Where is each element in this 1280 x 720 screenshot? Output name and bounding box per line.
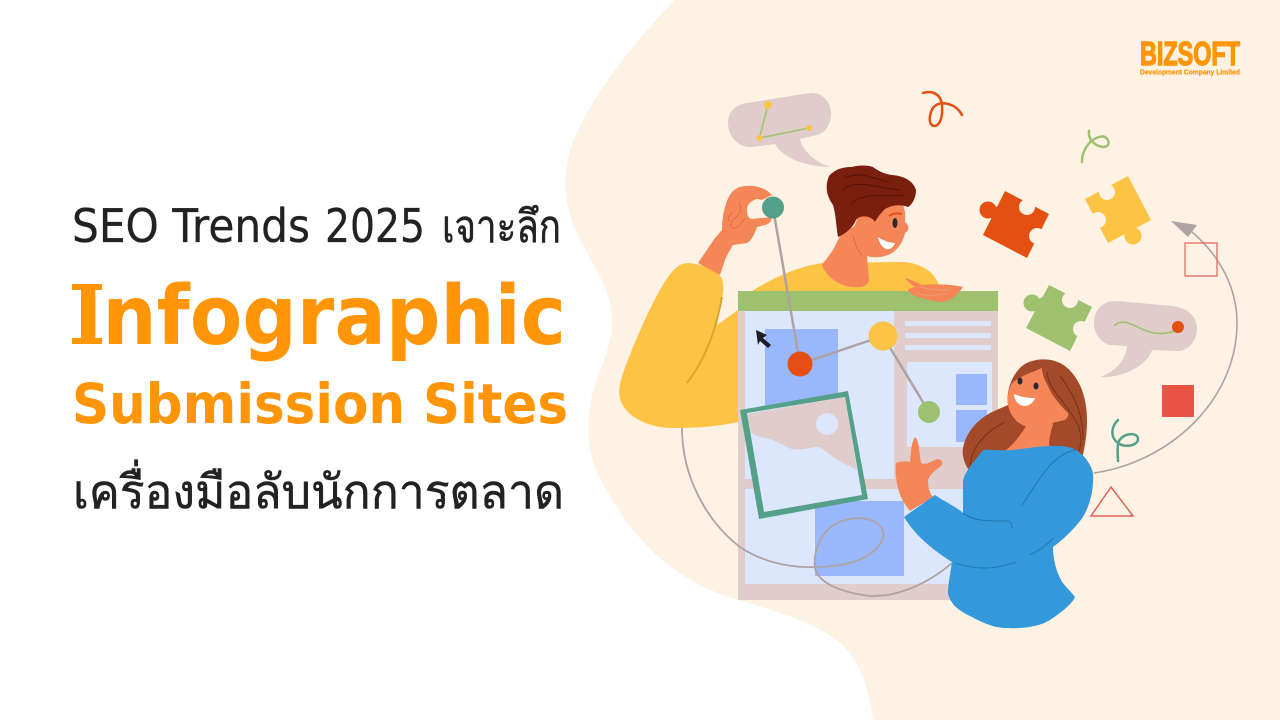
side block two [956, 410, 987, 442]
heading line 1 [72, 199, 561, 253]
pointing hand [896, 437, 942, 511]
heading line 2: Infographic [74, 269, 566, 364]
window frame [738, 291, 998, 600]
blue top [904, 446, 1093, 628]
mouse cursor icon [756, 330, 771, 348]
eyes [1018, 378, 1022, 384]
eyebrow [889, 213, 902, 216]
blue block top [765, 329, 838, 419]
eye [892, 218, 898, 228]
puzzle green [1024, 285, 1092, 351]
hair strands [971, 372, 1083, 470]
hair strands [842, 175, 905, 205]
neck [1005, 424, 1053, 451]
curved thread [682, 428, 952, 596]
bubble line [1114, 322, 1175, 334]
main pane [745, 311, 894, 479]
finger lines [728, 203, 745, 228]
side block one [956, 374, 987, 405]
title block [72, 199, 568, 520]
speech bubble top [728, 93, 831, 167]
woman illustration [896, 359, 1093, 628]
heading line 1: SEO Trends [72, 199, 310, 253]
text lines [905, 321, 991, 350]
neck line [853, 235, 863, 256]
node yellow [868, 322, 898, 350]
connector lines [773, 208, 929, 412]
face [852, 202, 908, 257]
raised hand [698, 186, 772, 275]
face [1008, 368, 1068, 428]
dress lines [955, 450, 1076, 568]
sleeve crease [687, 297, 722, 383]
hair [827, 166, 916, 237]
squiggle orange [923, 92, 962, 126]
neck [822, 222, 869, 287]
lower pane [745, 489, 970, 584]
arm and sleeve [619, 263, 745, 428]
node orange [788, 352, 812, 376]
background blob [565, 0, 1280, 720]
squiggle teal [1112, 420, 1138, 461]
picture mountain [747, 397, 857, 470]
outlined square [1185, 243, 1217, 276]
logo [1140, 35, 1240, 76]
torso [745, 262, 942, 296]
outlined triangle [1091, 487, 1133, 516]
puzzle yellow [1085, 176, 1151, 244]
node teal [762, 196, 784, 218]
side panel [907, 362, 992, 447]
bubble nodes [756, 101, 812, 141]
puzzle orange [980, 191, 1049, 258]
window panel [738, 291, 998, 600]
logo: Development Company Limited [1140, 68, 1240, 76]
man illustration body [619, 166, 942, 428]
node green [918, 401, 940, 423]
bubble chart lines [760, 105, 809, 138]
green title bar [738, 291, 998, 311]
hand finger lines [916, 287, 948, 295]
man hand on window [905, 278, 963, 302]
heading line 1: 2025 [325, 199, 425, 253]
ear [855, 218, 872, 238]
red square [1162, 385, 1194, 417]
picture sun [816, 413, 838, 435]
smile [878, 237, 895, 249]
heading line 3: Submission Sites [72, 372, 568, 436]
blue block bottom [815, 501, 904, 576]
picture frame [740, 391, 868, 519]
speech bubble right [1094, 301, 1197, 377]
big arc with arrow [1094, 221, 1237, 473]
bubble dot [1172, 321, 1184, 333]
back hair [963, 359, 1087, 472]
logo: BIZSOFT [1140, 35, 1240, 72]
squiggle green [1082, 131, 1109, 162]
smile [1014, 394, 1035, 406]
heading line 1: เจาะลึก [442, 200, 561, 253]
heading line 4: เครื่องมือลับนักการตลาด [73, 459, 564, 520]
